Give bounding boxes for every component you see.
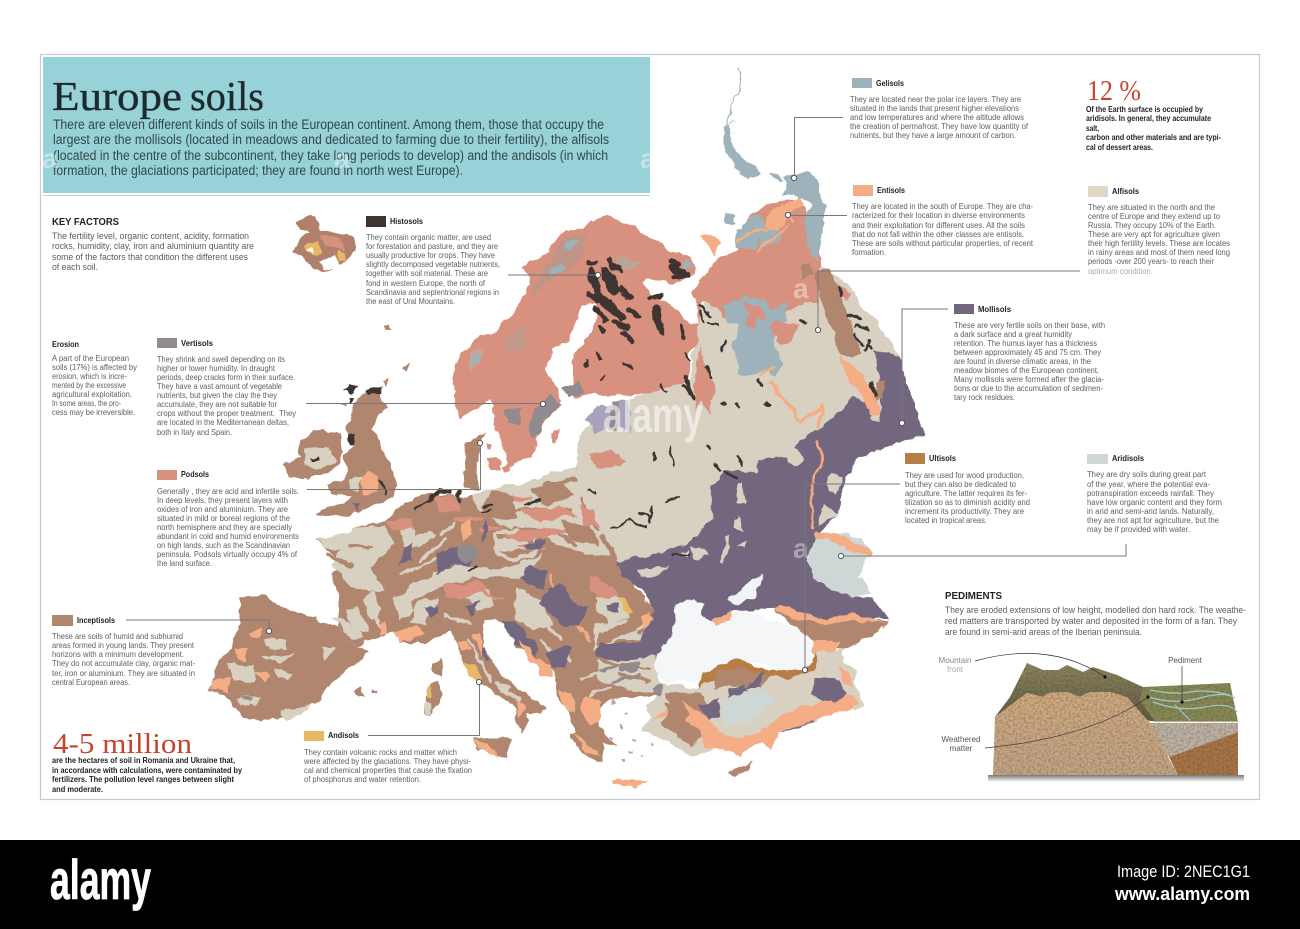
sub-region: Italian and Adriatic detail [380,582,640,755]
title: soils [190,73,264,119]
callout: erosion: mented by the excessive [52,381,126,390]
region: Scandinavia, Finland and north-west Russia podsols [453,200,823,467]
region: British Isles and Iceland [283,216,410,518]
legend: alfisols: Alfisols [1112,186,1139,196]
sub-region: north German and Polish mosaic [387,480,600,545]
label: weathered matter [942,695,1150,753]
title: Europe [52,73,182,119]
legend: gelisols: the creation of permafrost. They have low quantity of [850,122,1029,131]
legend: podsols: on high lands, such as the Scandinavian [157,541,290,550]
callout: pediments: PEDIMENTS [945,590,1002,602]
watermark letters: a [42,143,58,174]
legend: podsols: the land surface. [157,559,212,568]
legend: inceptisols: horizons with a minimum development. [52,650,184,659]
region: aridisols of the Caspian [807,530,872,598]
callout: erosion: A part of the European [52,354,129,363]
legend: entisols: and their exploitation for different uses. All the soils [852,221,1025,230]
legend: histosols: for forestation and pasture, and they are [366,242,499,251]
statistic: 12 percent [1086,75,1221,152]
legend: aridisols: potranspiration exceeds rainfall. They [1087,489,1214,498]
legend: vertisols: higher or lower humidity. In draught [157,364,276,373]
legend: mollisols [954,304,1105,402]
label: mountain front [939,653,1107,679]
region: Caucasus and Turkey [640,606,890,757]
mountain top surface [995,663,1160,722]
legend: aridisols: in arid and semi-arid lands. Naturally, [1087,507,1214,516]
legend: alfisols: optimum condition. [1088,267,1153,276]
legend: entisols: formation. [852,248,886,257]
legend: mollisols: Mollisols [978,304,1011,314]
legend: ultisols: agriculture. The latter requires its fer- [905,489,1027,498]
legend: aridisols: they are not apt for agriculture, but the [1087,516,1220,525]
statistic: 4-5 million: and moderate. [52,785,103,794]
legend: andisols: Andisols [328,730,359,740]
page frame [40,54,1260,800]
legend: ultisols [905,453,1030,525]
statistic: 12 percent: salt, [1086,124,1099,133]
legend: podsols: abundant in cold and humid environments [157,532,299,541]
website: www.alamy.com [1114,884,1250,904]
statistic: 4-5 million: in accordance with calculations, were contaminated by [52,766,242,775]
legend: aridisols: have low organic content and they form [1087,498,1222,507]
intro text: largest are the mollisols (located in meadows and dedicated to farming due to their fertility), the alfisols [53,132,609,147]
legend: vertisols: nutrients, but given the clay the they [157,391,277,400]
legend: gelisols: and low temperatures and where the altitude allows [850,113,1024,122]
legend: aridisols: of the year, where the potential eva- [1087,480,1210,489]
callout: erosion: In some areas, the pro- [52,399,121,408]
legend: alfisols: periods -over 200 years- to reach their [1088,257,1214,266]
legend: inceptisols: They do not accumulate clay, organic mat- [52,659,195,668]
intro text [53,117,609,178]
sub-region: Pannonian and Balkan mollisols [400,520,590,668]
region: Iberian Peninsula [208,595,370,720]
leader lines with location dots [126,118,1126,736]
legend: ultisols: located in tropical areas. [905,516,987,525]
legend: andisols: cal and chemical properties that cause the fixation [304,766,472,775]
legend: vertisols: periods, deep cracks form in their surface. [157,373,295,382]
watermark letters [42,143,809,564]
legend: vertisols: They shrink and swell depending on its [157,355,285,364]
legend: alfisols: in rainy areas and most of them need long [1088,248,1230,257]
callout: pediments: red matters are transported by water and deposited in the form of a fan. They [945,616,1237,626]
legend: histosols: fond in western Europe, the north of [366,279,486,288]
footer logo: alamy [50,848,151,911]
legend: ultisols: They are used for wood production, [905,471,1024,480]
legend: mollisols: tions or due to the accumulation of sedimen- [954,384,1103,393]
callout: key factors: some of the factors that condition the different uses [52,252,248,262]
callout: key factors: of each soil. [52,262,98,272]
legend: gelisols: nutrients, but they have a large amount of carbon. [850,131,1016,140]
legend: podsols: north hemisphere and they are specially [157,523,292,532]
region: mollisols of the Russian plain [597,350,925,660]
legend: histosols: together with soil material. These are [366,269,489,278]
legend: vertisols: They have a vast amount of vegetable [157,382,283,391]
legend: inceptisols: These are soils of humid and subhumid [52,632,183,641]
intro text: formation, the glaciations participated; they are found in north west Europe). [53,163,463,178]
legend: alfisols: They are situated in the north and the [1088,203,1216,212]
legend: mollisols: meadow biomes of the European continent. [954,366,1099,375]
watermark letters: a [793,273,809,304]
legend: mollisols: between approximately 45 and 75 cm. They [954,348,1101,357]
legend: inceptisols: ter, iron or aluminium. They are situated in [52,669,195,678]
legend: inceptisols [52,615,195,687]
label: weathered matter: Weathered [942,735,980,744]
legend: alfisols: centre of Europe and they extend up to [1088,212,1221,221]
callout: key factors [52,217,254,272]
legend: mollisols: tary rock residues. [954,393,1015,402]
legend: ultisols: Ultisols [929,453,956,463]
statistic: 4-5 million: are the hectares of soil in Romania and Ukraine that, [52,756,235,765]
legend: aridisols: They are dry soils during great part [1087,470,1207,479]
callout: key factors: KEY FACTORS [52,217,119,228]
legend: entisols: that do not fall within the other classes are entisols. [852,230,1024,239]
legend: alfisols: These are very apt for agriculture given [1088,230,1220,239]
statistic: 12 percent: aridisols. In general, they accumulate [1086,114,1211,123]
legend: histosols: the east of Ural Mountains. [366,297,455,306]
region: Jutland and Danish islands [463,430,510,490]
streams [1148,690,1237,720]
legend: histosols: Scandinavia and septentrional regions in [366,288,499,297]
legend: inceptisols: central European areas. [52,678,130,687]
region: central Europe inceptisols [315,465,660,763]
legend: podsols: Podsols [181,469,209,479]
shadow under block [988,775,1244,782]
header panel [43,57,650,196]
legend: podsols: Generally , they are acid and infertile soils. [157,487,299,496]
callout: erosion: erosion, which is incre- [52,372,127,381]
sediment wedge [1150,723,1238,757]
legend: histosols: They contain organic matter, are used [366,233,491,242]
legend: mollisols: a dark surface and a great humidity [954,330,1072,339]
legend: podsols [157,469,299,568]
legend: podsols: situated in mild or boreal regions of the [157,514,291,523]
legend: aridisols [1087,453,1222,534]
callout: key factors: rocks, humidity, clay, iron and aluminium quantity are [52,241,254,251]
legend: histosols: Histosols [390,216,423,226]
callout: erosion: Erosion [52,339,79,349]
legend: mollisols: are found in diverse climatic areas, in the [954,357,1092,366]
legend: vertisols: Vertisols [181,338,213,348]
rock cross-section [993,692,1178,775]
statistic: 4-5 million [52,728,242,794]
bedrock wedge [1169,732,1238,775]
region: Arctic gelisols and entisols [700,68,885,428]
legend: histosols: usually productive for crops. They have [366,251,496,260]
title [52,73,264,119]
legend: alfisols: Russia. They occupy 10% of the Earth. [1088,221,1216,230]
legend: inceptisols: Inceptisols [77,615,115,625]
legend: vertisols: accumulate, they are not suitable for [157,400,277,409]
statistic: 12 percent: carbon and other materials and are typi- [1086,133,1221,142]
legend: podsols: peninsula. Podsols virtually occupy 4% of [157,550,298,559]
region: histosols [382,260,876,570]
sub-region: Iceland [290,216,357,272]
intro text: (located in the centre of the subcontinent, they take long periods to develop) and the andisols (in which [53,148,608,163]
legend: gelisols: They are located near the polar ice layers. They are [850,95,1022,104]
statistic: 12 percent: 12 % [1087,75,1141,107]
footer band [0,840,1300,929]
label: pediment [1168,656,1203,704]
sub-region: mosaic streaks [330,480,660,700]
statistic: 4-5 million: 4-5 million [53,728,193,760]
legend: vertisols: both in Italy and Spain. [157,428,232,437]
legend: entisols: Entisols [877,185,905,195]
legend: podsols: In deep levels, they present layers with [157,496,288,505]
legend: andisols: of phosphorus and water retention. [304,775,421,784]
legend: vertisols: are located in the Mediterranean deltas, [157,418,289,427]
legend: andisols: were affected by the glaciations. They have physi- [303,757,471,766]
legend: inceptisols: areas formed in young lands. They present [52,641,195,650]
watermark letters: a [334,143,350,174]
callout: erosion [52,339,137,417]
legend: alfisols: their high fertility levels. These are locates [1088,239,1230,248]
callout: key factors: The fertility level, organic content, acidity, formation [52,231,249,241]
legend: podsols: oxides of iron and aluminium. They are [157,505,289,514]
callout: erosion: soils (17%) is affected by [52,363,137,372]
region: Black Sea [655,600,813,682]
pediment surface [1140,683,1238,722]
label: mountain front: front [947,665,964,674]
legend: andisols: They contain volcanic rocks and matter which [304,748,457,757]
legend: mollisols: Many mollisols were formed after the glacia- [954,375,1104,384]
map of Europe soils [208,68,925,787]
legend: entisols [852,185,1034,257]
legend: andisols [303,730,472,784]
sub-region: Carpathian arc [520,553,655,647]
legend: aridisols: Aridisols [1112,453,1144,463]
legend: entisols: They are located in the south of Europe. They are cha- [852,202,1033,211]
callout: pediments: are found in semi-arid areas of the Iberian peninsula. [945,627,1142,637]
label: pediment: Pediment [1168,656,1203,665]
legend: mollisols: These are very fertile soils on their base, with [954,321,1105,330]
legend: vertisols: crops without the proper treatment. They [157,409,296,418]
legend: histosols: slightly decomposed vegetable nutrients, [366,260,500,269]
legend: gelisols: situated in the lands that present higher elevations [850,104,1019,113]
legend: aridisols: may be if provided with water. [1087,525,1190,534]
region: east European alfisol plain [555,265,900,575]
legend: mollisols: retention. The humus layer has a thickness [954,339,1097,348]
statistic: 4-5 million: fertilizers. The pollution level ranges between slight [52,775,234,784]
region: Mediterranean islands [353,658,753,787]
label: mountain front: Mountain [939,656,971,665]
legend: ultisols: tilization so as to diminish acidity and [905,498,1030,507]
legend: histosols [366,216,500,306]
watermark letters: a [640,143,656,174]
legend: ultisols: but they can also be dedicated to [905,480,1017,489]
legend: entisols: These are soils without particular properties, of recent [852,239,1034,248]
image id: Image ID: 2NEC1G1 [1117,863,1250,881]
statistic: 12 percent: cal of dessert areas. [1086,143,1153,152]
legend: alfisols [1088,186,1230,276]
callout: erosion: agricultural exploitation. [52,390,132,399]
legend: ultisols: increment its productivity. They are [905,507,1025,516]
legend: entisols: racterized for their location in diverse environments [852,211,1025,220]
watermark: alamy on map: alamy [603,387,703,443]
callout: pediments: They are eroded extensions of low height, modelled don hard rock. The weathe- [945,605,1246,615]
legend: gelisols: Gelisols [876,78,904,88]
statistic: 12 percent: Of the Earth surface is occupied by [1086,105,1203,114]
callout: pediments [945,590,1246,637]
legend: vertisols [157,338,296,437]
intro text: There are eleven different kinds of soils in the European continent. Among them, those that occupy the [53,117,604,132]
watermark letters: a [793,533,809,564]
label: weathered matter: matter [950,744,973,753]
callout: erosion: cess may be irreversible. [52,408,135,417]
diagram: pediment block [939,653,1244,782]
legend: gelisols [850,78,1029,140]
